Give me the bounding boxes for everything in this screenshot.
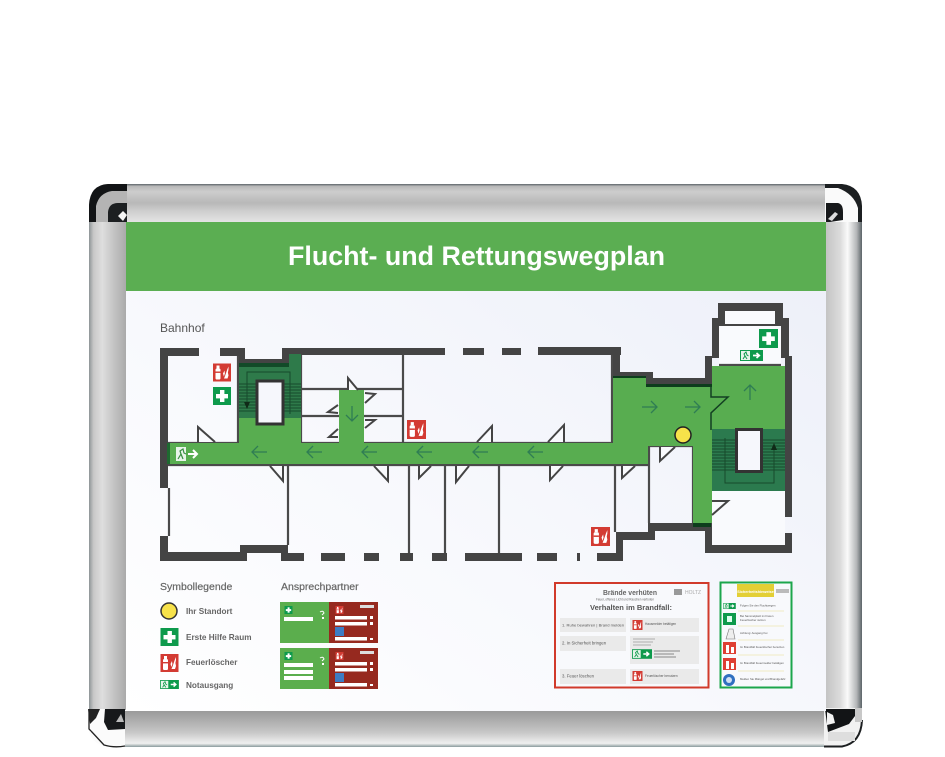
panel: safety notes <box>720 582 792 688</box>
poster sheet <box>126 222 826 711</box>
panel: fire instructions <box>555 583 708 688</box>
step 1: 1. Ruhe bewahren | Brand melden <box>562 622 624 628</box>
frame corner: top right <box>825 184 862 222</box>
icon: first aid tower <box>759 329 778 348</box>
safety notes heading: Sicherheitshinweise <box>737 590 774 594</box>
step 1: Hausmelder betätigen <box>645 622 676 626</box>
frame corner: top left <box>89 184 127 222</box>
note rows: Im Brandfall Feuermelder betätigen <box>740 661 784 665</box>
frame corner: bottom right <box>824 708 862 747</box>
note rows: Melden Sie Mängel und Brandgefahr <box>740 677 786 681</box>
contact card 1 <box>280 602 378 643</box>
note rows: Folgen Sie den Fluchtwegen <box>740 604 776 608</box>
logo <box>674 589 701 596</box>
step 3: Feuerlöscher benutzen <box>645 674 678 678</box>
step 3 <box>560 669 699 684</box>
location heading: Bahnhof <box>160 321 205 335</box>
title banner <box>126 222 826 291</box>
note rows: Feuerlöscher nutzen <box>740 618 766 622</box>
note rows <box>723 603 786 686</box>
note rows: Bei Sammelplatz im Freien <box>740 614 774 618</box>
contact card 2 <box>280 648 378 689</box>
step 2 <box>560 636 699 664</box>
icon: fire extinguisher left room <box>213 364 231 382</box>
picture frame <box>88 184 862 747</box>
upper room dividers <box>168 355 781 553</box>
green escape route <box>167 366 785 527</box>
legend <box>160 581 252 690</box>
fire subheading: Feuer, offenes Licht und Rauchen verboten <box>596 598 654 602</box>
contacts heading: Ansprechpartner <box>281 581 359 593</box>
title banner: Flucht- und Rettungswegplan <box>288 241 665 271</box>
white rooms <box>712 311 785 545</box>
frame corner: bottom left <box>88 709 125 747</box>
step 3: 3. Feuer löschen <box>562 674 595 678</box>
note rows: Im Brandfall Feuerlöscher benutzen <box>740 645 785 649</box>
outer walls <box>160 303 792 561</box>
door swings <box>198 378 728 515</box>
icon: you are here <box>675 427 691 443</box>
step 2: 2. In Sicherheit bringen <box>562 640 607 646</box>
icon: corridor exit sign <box>176 447 197 461</box>
legend item: extinguisher: Feuerlöscher <box>186 658 238 667</box>
icon: exit tower <box>740 350 763 361</box>
logo: HOLTZ <box>685 590 701 596</box>
floor plan <box>160 303 792 561</box>
icon: fire extinguisher corridor <box>407 420 426 439</box>
fire procedure heading: Verhalten im Brandfall: <box>590 603 672 612</box>
right staircase <box>712 429 785 491</box>
direction arrows <box>252 385 756 458</box>
legend heading: Symbollegende <box>160 581 233 593</box>
legend item: first aid: Erste Hilfe Raum <box>186 633 252 642</box>
legend item: exit: Notausgang <box>186 681 233 690</box>
note rows: Achtung: Ausgang frei <box>740 631 768 635</box>
fire heading: Brände verhüten <box>603 588 657 597</box>
icon: first aid left room <box>213 387 231 405</box>
legend item: location: Ihr Standort <box>186 607 233 616</box>
left staircase <box>239 354 301 424</box>
step 1 <box>560 618 699 632</box>
icon: fire extinguisher lower room <box>591 527 610 546</box>
